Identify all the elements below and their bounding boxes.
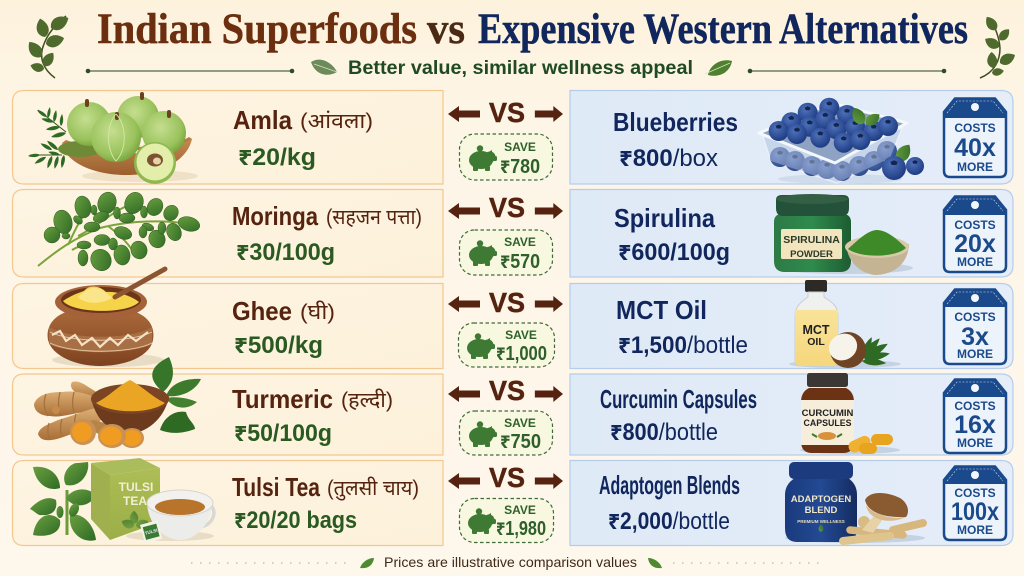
footer note: Prices are illustrative comparison values xyxy=(384,554,637,570)
label: Blueberries name: Blueberries xyxy=(613,107,738,137)
savings badge xyxy=(458,323,554,367)
price tag: costs 40x more: 40x xyxy=(954,134,996,162)
savings badge: SAVE xyxy=(504,235,536,249)
label: Curcumin Capsules price: ₹800/bottle xyxy=(610,419,718,446)
icon: curcumin bottle and capsules: CAPSULES xyxy=(804,418,852,428)
VS label: VS xyxy=(489,287,525,318)
label: Tulsi Tea price: ₹20/20 bags xyxy=(234,507,357,534)
label: Amla name: Amla xyxy=(233,105,293,135)
price tag: costs 16x more: COSTS xyxy=(954,399,996,413)
savings badge: ₹570 xyxy=(500,251,540,273)
label: Blueberries price: ₹800/box xyxy=(619,145,718,172)
row 5: Tulsi Tea vs Adaptogen Blends xyxy=(12,458,1013,546)
panel: Tulsi Tea xyxy=(12,460,443,546)
price tag: costs 40x more: MORE xyxy=(957,160,993,174)
icon: tulsi plant, tea box and cup: TEA xyxy=(123,494,147,508)
price tag: costs 3x more: MORE xyxy=(957,347,993,361)
divider right xyxy=(748,69,946,73)
savings badge: SAVE xyxy=(504,503,536,517)
arrow left xyxy=(448,473,480,489)
price tag: costs 20x more: COSTS xyxy=(954,218,996,232)
arrow right xyxy=(535,473,563,489)
price tag: costs 20x more: 20x xyxy=(954,230,996,258)
savings badge: ₹750 xyxy=(500,431,541,453)
icon: adaptogen jar and mushrooms: ADAPTOGEN xyxy=(791,494,851,505)
price tag: costs 16x more xyxy=(944,379,1006,453)
title: vs xyxy=(427,6,465,53)
label: Curcumin Capsules name: Curcumin Capsules xyxy=(600,384,757,414)
price tag: costs 3x more: 3x xyxy=(961,323,989,351)
title xyxy=(97,6,968,53)
price tag: costs 20x more: MORE xyxy=(957,255,993,269)
label: Ghee Hindi name: (घी) xyxy=(300,300,335,324)
row 4: Turmeric vs Curcumin Capsules xyxy=(12,357,1013,455)
icon: spirulina jar and bowl xyxy=(774,194,913,275)
price tag: costs 20x more xyxy=(944,196,1006,272)
label: Turmeric name: Turmeric xyxy=(232,384,333,414)
icon: tulsi plant, tea box and cup: TULSI xyxy=(119,480,153,494)
panel: Ghee xyxy=(12,284,443,368)
arrow right xyxy=(535,106,563,122)
price tag: costs 100x more xyxy=(944,466,1006,540)
label: Ghee price: ₹500/kg xyxy=(234,332,323,359)
savings badge: ₹1,000 xyxy=(496,343,547,365)
label: Spirulina name: Spirulina xyxy=(614,203,715,233)
savings badge xyxy=(460,134,552,180)
label: Tulsi Tea Hindi name: (तुलसी चाय) xyxy=(327,476,419,501)
label: Amla price: ₹20/kg xyxy=(238,144,316,171)
label: Ghee name: Ghee xyxy=(232,296,292,326)
subtitle: Better value, similar wellness appeal xyxy=(348,58,693,79)
panel: MCT Oil xyxy=(570,284,1013,368)
savings badge: ₹780 xyxy=(500,156,540,178)
VS label: VS xyxy=(489,97,525,128)
panel: Spirulina xyxy=(570,190,1013,277)
label: Moringa price: ₹30/100g xyxy=(236,239,335,266)
icon: left leaf sprig xyxy=(25,12,71,78)
icon: subtitle leaf right xyxy=(705,60,732,76)
panel: Amla xyxy=(12,90,443,184)
label: Turmeric price: ₹50/100g xyxy=(234,420,332,447)
savings badge: SAVE xyxy=(504,416,536,430)
panel: Turmeric xyxy=(12,374,443,455)
icon: blueberry tray xyxy=(759,98,924,184)
price tag: costs 40x more: COSTS xyxy=(954,121,996,135)
icon: spirulina jar and bowl: POWDER xyxy=(790,249,833,260)
row 2: Moringa vs Spirulina xyxy=(12,189,1013,277)
icon: adaptogen jar and mushrooms: BLEND xyxy=(805,505,837,516)
VS label: VS xyxy=(489,375,525,406)
row 1: Amla vs Blueberries xyxy=(12,90,1013,184)
icon: MCT oil bottle and coconut: MCT xyxy=(802,323,830,337)
price tag: costs 100x more: MORE xyxy=(957,523,993,537)
title: Indian Superfoods xyxy=(97,6,417,53)
icon: spirulina jar and bowl: SPIRULINA xyxy=(783,234,840,246)
footer note xyxy=(191,554,824,570)
label: Amla Hindi name: (आंवला) xyxy=(300,110,373,133)
panel: Blueberries xyxy=(570,90,1013,184)
icon: right leaf sprig xyxy=(980,14,1017,78)
divider left xyxy=(86,69,294,73)
arrow right xyxy=(535,296,563,312)
panel: Adaptogen Blends xyxy=(570,460,1013,546)
label: Turmeric Hindi name: (हल्दी) xyxy=(341,388,393,412)
price tag: costs 16x more: 16x xyxy=(954,411,996,439)
price tag: costs 3x more: COSTS xyxy=(954,310,996,324)
savings badge: ₹1,980 xyxy=(496,518,546,540)
label: Moringa Hindi name: (सहजन पत्ता) xyxy=(326,206,422,229)
price tag: costs 3x more xyxy=(944,289,1006,364)
icon: moringa branch xyxy=(38,189,201,275)
row 3: Ghee vs MCT Oil xyxy=(12,269,1013,368)
label: MCT Oil name: MCT Oil xyxy=(616,295,707,325)
icon: subtitle leaf left xyxy=(311,60,337,75)
price tag: costs 100x more: COSTS xyxy=(954,486,996,500)
arrow right xyxy=(535,203,563,219)
price tag: costs 16x more: MORE xyxy=(957,436,993,450)
savings badge: SAVE xyxy=(504,140,536,154)
icon: amla bowl xyxy=(28,94,198,184)
icon: adaptogen jar and mushrooms: PREMIUM WELLNESS xyxy=(797,519,845,524)
arrow left xyxy=(448,386,480,402)
label: Moringa name: Moringa xyxy=(232,201,318,231)
label: Adaptogen Blends price: ₹2,000/bottle xyxy=(608,508,730,535)
savings badge xyxy=(460,411,552,455)
VS label: VS xyxy=(489,462,525,493)
panel: Moringa xyxy=(12,190,443,277)
icon: adaptogen jar and mushrooms xyxy=(785,462,925,543)
VS label: VS xyxy=(489,192,525,223)
arrow left xyxy=(448,296,480,312)
icon: tulsi plant, tea box and cup xyxy=(30,458,214,543)
icon: curcumin bottle and capsules: CURCUMIN xyxy=(802,408,853,419)
savings badge: SAVE xyxy=(505,328,537,342)
icon: curcumin bottle and capsules xyxy=(800,373,900,455)
icon: MCT oil bottle and coconut: OIL xyxy=(807,336,825,348)
label: Tulsi Tea name: Tulsi Tea xyxy=(232,472,320,502)
icon: turmeric roots, bowl and leaves xyxy=(34,357,201,448)
arrow left xyxy=(448,203,480,219)
icon: MCT oil bottle and coconut xyxy=(789,280,901,368)
savings badge xyxy=(460,498,554,542)
icon: tulsi plant, tea box and cup: TULSI xyxy=(144,528,158,536)
price tag: costs 100x more: 100x xyxy=(951,498,999,526)
arrow right xyxy=(535,386,563,402)
savings badge xyxy=(460,230,552,275)
label: MCT Oil price: ₹1,500/bottle xyxy=(618,332,748,359)
arrow left xyxy=(448,106,480,122)
icon: ghee pot xyxy=(48,269,165,367)
panel: Curcumin Capsules xyxy=(570,374,1013,455)
label: Spirulina price: ₹600/100g xyxy=(618,239,730,266)
price tag: costs 40x more xyxy=(944,98,1006,177)
label: Adaptogen Blends name: Adaptogen Blends xyxy=(599,470,740,500)
